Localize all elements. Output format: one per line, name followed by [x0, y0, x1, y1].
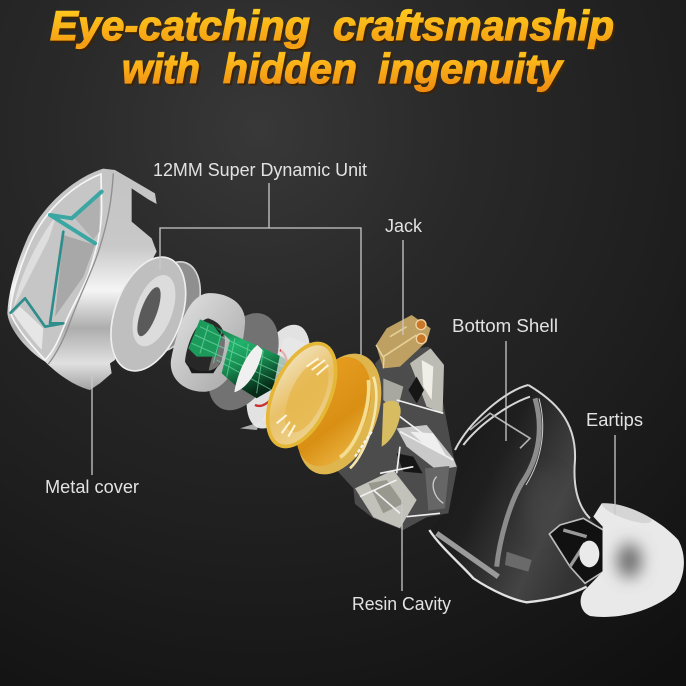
title: with — [124, 47, 202, 94]
label: Resin Cavity: Resin Cavity — [352, 594, 451, 614]
label: Metal cover: Metal cover — [45, 477, 139, 497]
title: hidden — [225, 47, 359, 94]
front washer — [171, 293, 245, 392]
gold cup — [281, 341, 398, 487]
translucent white washer — [240, 337, 305, 430]
white sliver — [234, 345, 263, 392]
title: craftsmanship — [333, 2, 614, 49]
coil — [200, 319, 289, 398]
label: Jack: Jack — [385, 216, 423, 236]
title: Eye-catching — [50, 2, 310, 49]
clear resin cavity — [240, 315, 457, 530]
label: Eartips: Eartips — [586, 410, 643, 430]
green voice coil with washers — [171, 293, 323, 437]
threaded ring — [97, 247, 212, 381]
label: 12MM Super Dynamic Unit: 12MM Super Dynamic Unit — [153, 160, 367, 180]
title — [50, 2, 616, 94]
leader: Metal cover — [91, 375, 93, 475]
leader: Jack — [402, 240, 404, 335]
title: ingenuity — [378, 45, 565, 92]
white washer — [234, 316, 323, 437]
nozzle — [549, 518, 603, 583]
title: ingenuity — [380, 47, 567, 94]
eartip — [579, 496, 684, 617]
label: Bottom Shell: Bottom Shell — [452, 316, 558, 336]
metal cover — [7, 169, 157, 390]
title: craftsmanship — [335, 4, 616, 51]
title: hidden — [223, 45, 357, 92]
leader: Bottom Shell — [505, 341, 507, 441]
gold reflection — [382, 401, 401, 447]
title: with — [122, 45, 200, 92]
gold diaphragm ring — [254, 333, 350, 457]
teal struts — [11, 192, 102, 327]
title: Eye-catching — [52, 4, 312, 51]
leader: 12MM Super Dynamic Unit — [160, 183, 361, 355]
gray washer — [194, 302, 293, 421]
leader: Resin Cavity — [401, 500, 403, 591]
red ring — [255, 350, 287, 406]
leader: Eartips — [614, 435, 616, 515]
bottom shell — [429, 385, 684, 617]
gold jack — [376, 315, 431, 368]
cover face — [10, 174, 102, 360]
